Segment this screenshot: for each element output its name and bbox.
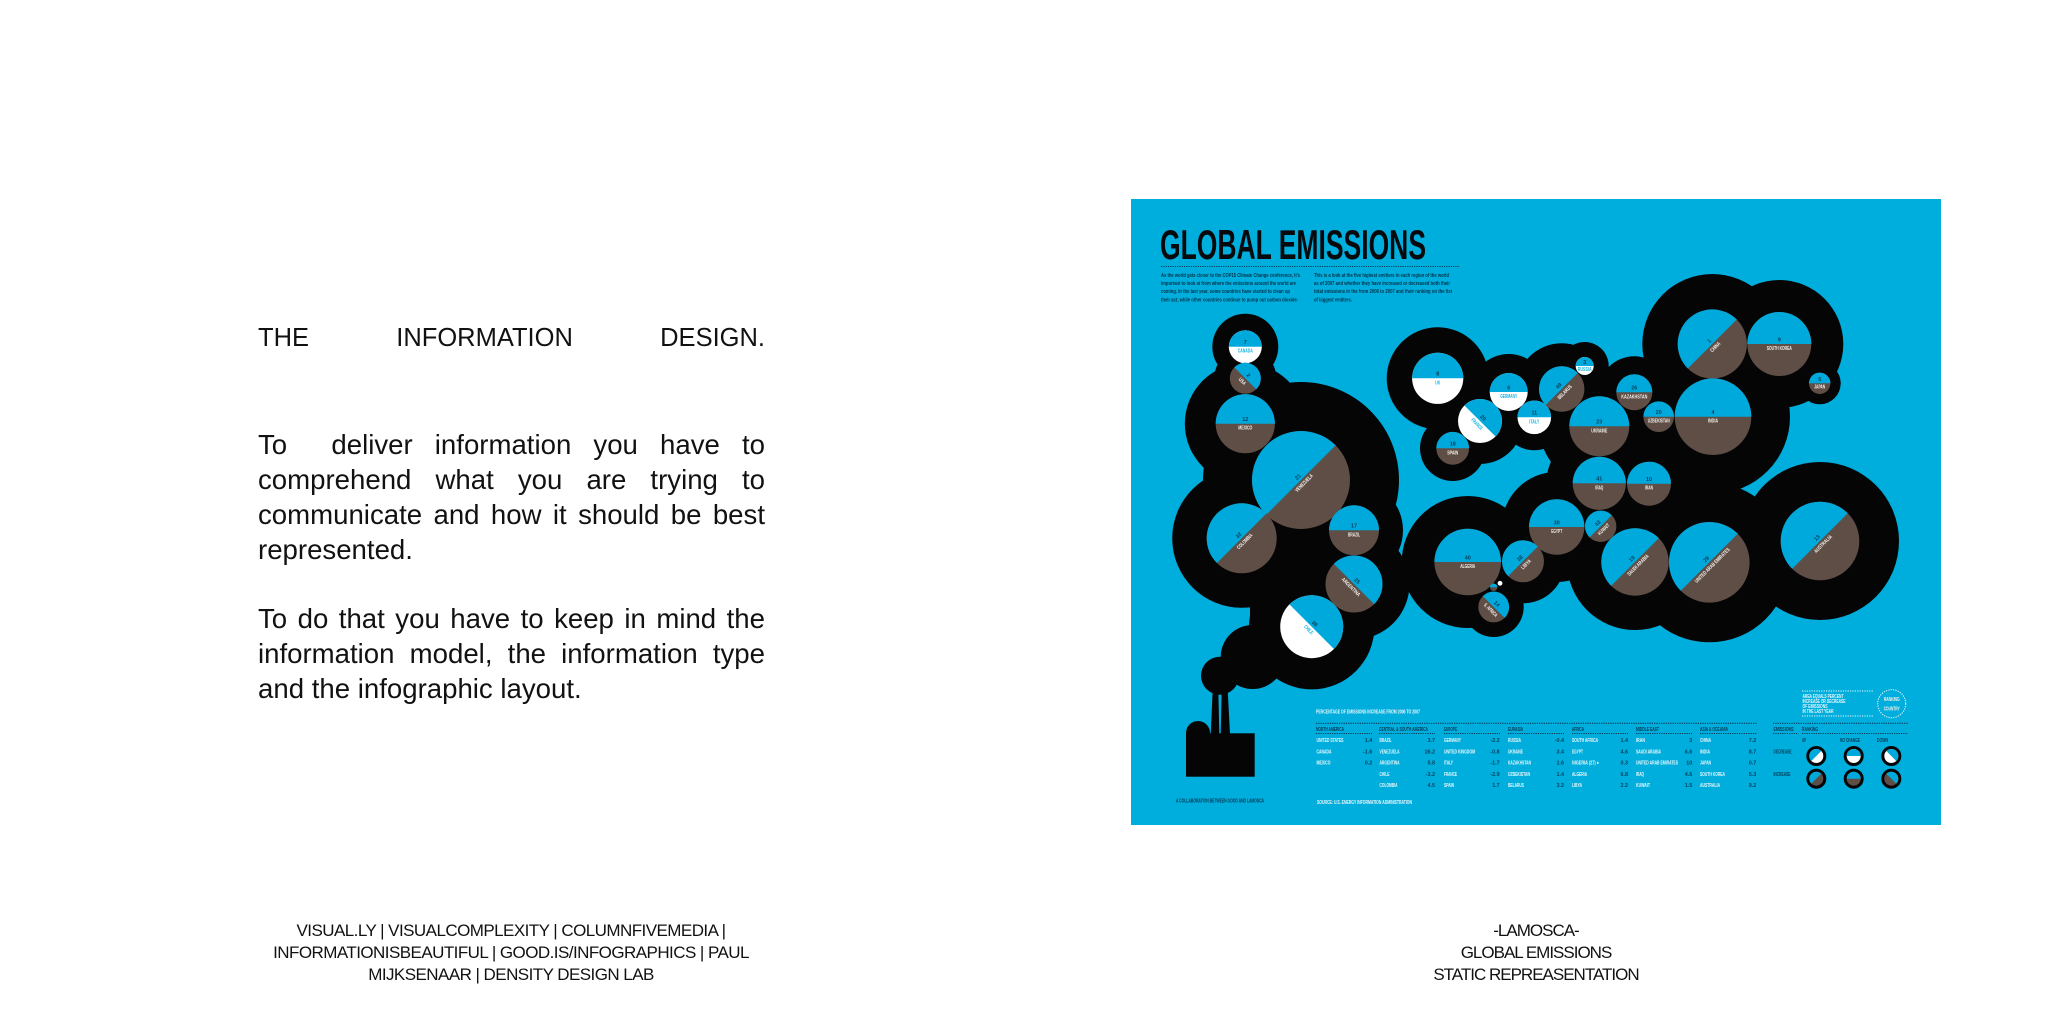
country: Kuwait: KUWAIT: [1597, 522, 1612, 537]
intro text: This is a look at the five highest emitters in each region of the world: [1314, 273, 1449, 279]
country: UK: [1412, 353, 1463, 404]
column: Africa: 6.8: [1620, 772, 1628, 778]
column: Central and South America: [1379, 727, 1435, 789]
country: Russia: RUSSIA: [1578, 367, 1592, 373]
country: France: [1449, 390, 1511, 452]
column: Middle East: MIDDLE EAST: [1636, 727, 1659, 733]
country: Canada: 7: [1244, 340, 1247, 346]
column: North America: NORTH AMERICA: [1316, 727, 1344, 733]
column: Asia and Oceania: CHINA: [1700, 738, 1711, 744]
column: Africa: 2.2: [1620, 783, 1628, 789]
legend: emissions and ranking: RANKING: [1802, 727, 1818, 733]
column: Asia and Oceania: ASIA & OCEANIA: [1700, 727, 1728, 733]
country: India: 4: [1712, 410, 1714, 416]
country: Ukraine: UKRAINE: [1591, 428, 1608, 434]
column: North America: 1.4: [1365, 738, 1372, 744]
text block: deliver information: communicate and how it should be best: [258, 499, 765, 530]
country: Nigeria: [1490, 581, 1502, 591]
text block: keep in mind: To do that you have to keep in mind the: [258, 603, 765, 634]
column: Middle East: IRAN: [1636, 738, 1645, 744]
country: Iraq: [1573, 457, 1626, 510]
country: Colombia: 32: [1235, 532, 1243, 540]
country: Colombia: [1192, 489, 1291, 588]
country: South Africa: S. AFRICA: [1482, 602, 1498, 619]
column: Europe: UNITED KINGDOM: [1444, 750, 1475, 756]
smoke cloud: [1172, 274, 1899, 695]
caption: global emissions credit: [1433, 921, 1639, 984]
column: Middle East: UNITED ARAB EMIRATES: [1636, 761, 1678, 767]
legend key: ranking country: RANKING: [1884, 697, 1900, 703]
country: Japan: 5: [1818, 377, 1821, 383]
country: Italy: [1518, 400, 1551, 434]
intro text: coming. In the last year, some countries have started to clean up: [1161, 289, 1290, 295]
country: Belarus: [1530, 357, 1594, 421]
country: Uzbekistan: UZBEKISTAN: [1648, 419, 1670, 425]
column: Middle East: SAUDI ARABIA: [1636, 750, 1661, 756]
country: United Arab Emirates: [1652, 505, 1766, 619]
intro text: As the world gets closer to the COP15 Climate Change conference, it's: [1161, 273, 1300, 279]
column: Europe: ITALY: [1444, 761, 1453, 767]
column: Central and South America: CHILE: [1380, 772, 1390, 778]
column: Africa: EGYPT: [1572, 750, 1583, 756]
column: Asia and Oceania: 7.2: [1749, 738, 1756, 744]
legend key: ranking country: COUNTRY: [1884, 706, 1900, 712]
column: Central and South America: 5.8: [1428, 761, 1435, 767]
country: Canada: CANADA: [1238, 349, 1253, 355]
country: Kazakhstan: KAZAKHSTAN: [1621, 394, 1647, 400]
text block: keep in mind: [258, 603, 765, 704]
country: Australia: [1764, 485, 1876, 597]
column: Central and South America: BRAZIL: [1380, 738, 1392, 744]
column: North America: CANADA: [1316, 750, 1332, 756]
column: Africa: LIBYA: [1572, 783, 1582, 789]
column: North America: -1.6: [1363, 750, 1372, 756]
legend: emissions and ranking: UP: [1802, 738, 1806, 744]
legend note: area equals percent: OF EMISSIONS: [1802, 704, 1828, 710]
country: Italy: ITALY: [1529, 419, 1540, 425]
column: Middle East: 1.5: [1685, 783, 1692, 789]
column: Asia and Oceania: SOUTH KOREA: [1700, 772, 1725, 778]
country: Kuwait: 43: [1594, 520, 1602, 528]
country: Argentina: 25: [1352, 577, 1361, 586]
column: Africa: 4.6: [1620, 750, 1628, 756]
column: Africa: 0.3: [1620, 761, 1628, 767]
column: Africa: [1572, 727, 1628, 789]
country: South Africa: [1472, 585, 1515, 629]
column: Africa: ALGERIA: [1572, 772, 1587, 778]
country: Algeria: ALGERIA: [1460, 564, 1475, 570]
country: USA: 2: [1245, 373, 1251, 379]
country: Iran: IRAN: [1645, 486, 1653, 492]
country: Argentina: [1314, 544, 1394, 624]
country: United Arab Emirates: UNITED ARAB EMIRATES: [1694, 547, 1732, 585]
country: Russia: 3: [1583, 360, 1586, 366]
legend note: area equals percent: AREA EQUALS PERCENT: [1802, 694, 1844, 700]
legend: emissions and ranking: EMISSIONS: [1774, 727, 1794, 733]
country: Chile: 36: [1310, 620, 1318, 628]
country: Libya: 38: [1516, 555, 1525, 563]
country: Argentina: ARGENTINA: [1340, 577, 1361, 598]
country: Kazakhstan: 26: [1631, 386, 1637, 392]
poster title: GLOBAL EMISSIONS: [1160, 221, 1426, 268]
column: Middle East: IRAQ: [1636, 772, 1644, 778]
column: Central and South America: -3.2: [1426, 772, 1435, 778]
country: Italy: 11: [1531, 411, 1537, 417]
country: Brazil: 17: [1351, 524, 1357, 530]
country: United Arab Emirates: 29: [1703, 556, 1711, 564]
column: Asia and Oceania: AUSTRALIA: [1700, 783, 1720, 789]
column: Middle East: [1636, 727, 1692, 789]
column: Middle East: KUWAIT: [1636, 783, 1650, 789]
country: Saudi Arabia: SAUDI ARABIA: [1627, 553, 1651, 578]
column: Africa: AFRICA: [1572, 727, 1584, 733]
column: Middle East: 4.6: [1685, 772, 1692, 778]
column: Asia and Oceania: 8.7: [1749, 750, 1756, 756]
heading: the information design: THE INFORMATION DESIGN.: [258, 324, 765, 352]
column: Europe: FRANCE: [1444, 772, 1457, 778]
column: Central and South America: VENEZUELA: [1380, 750, 1400, 756]
column: Africa: 1.4: [1620, 738, 1628, 744]
country: Egypt: [1529, 499, 1584, 555]
column: Europe: -1.7: [1490, 761, 1500, 767]
country: Belarus: 49: [1555, 382, 1563, 391]
intro text: of biggest emitters.: [1314, 298, 1352, 304]
legend: emissions and ranking: INCREASE: [1774, 772, 1791, 778]
country: Venezuela: 21: [1294, 473, 1303, 482]
legend note: area equals percent: IN THE LAST YEAR: [1802, 709, 1834, 715]
country: Mexico: [1216, 394, 1275, 453]
country: Colombia: COLOMBIA: [1236, 533, 1254, 551]
table rules: [1316, 723, 1757, 734]
column: Eurasia: 3.4: [1556, 750, 1564, 756]
column: Eurasia: UZBEKISTAN: [1508, 772, 1530, 778]
intro text: their act, while other countries continue to pump out carbon dioxide.: [1161, 298, 1298, 304]
factory icon: [1186, 690, 1255, 777]
country: USA: USA: [1237, 377, 1247, 387]
country: Spain: 18: [1450, 442, 1456, 448]
column: North America: MEXICO: [1316, 761, 1330, 767]
caption: global emissions credit: STATIC REPREASENTATION: [1433, 965, 1639, 984]
country: Egypt: 30: [1554, 520, 1560, 526]
country: Uzbekistan: 20: [1656, 410, 1662, 416]
country: Canada: [1229, 330, 1262, 363]
column: Eurasia: -0.4: [1555, 738, 1564, 744]
column: Europe: [1444, 727, 1500, 789]
intro text: as of 2007 and whether they have increased or decreased both their: [1314, 281, 1451, 287]
country: South Africa: 14: [1492, 600, 1500, 609]
column: Africa: SOUTH AFRICA: [1572, 738, 1598, 744]
country: Algeria: [1434, 529, 1501, 595]
intro text: total emissions in the from 2006 to 2007 and their ranking on the list: [1314, 289, 1452, 295]
country: Chile: CHILE: [1302, 624, 1314, 636]
column: Central and South America: 3.7: [1428, 738, 1435, 744]
column: Asia and Oceania: INDIA: [1700, 750, 1710, 756]
legend key: ranking country: [1878, 690, 1906, 718]
column: Eurasia: BELARUS: [1508, 783, 1524, 789]
legend: emissions and ranking: NO CHANGE: [1840, 738, 1860, 744]
column: Middle East: 6.6: [1685, 750, 1692, 756]
country: Venezuela: VENEZUELA: [1294, 473, 1315, 494]
country: UK: UK: [1435, 380, 1440, 386]
column: Eurasia: UKRAINE: [1508, 750, 1523, 756]
column: Eurasia: 3.2: [1556, 783, 1564, 789]
column: Central and South America: 16.2: [1424, 750, 1435, 756]
country: France: FRANCE: [1469, 417, 1484, 432]
country: Kuwait: [1578, 504, 1623, 549]
column: Eurasia: 1.4: [1556, 772, 1564, 778]
country: Saudi Arabia: 19: [1628, 555, 1637, 564]
country: Japan: [1809, 373, 1830, 394]
column: Europe: EUROPE: [1444, 727, 1457, 733]
country: Germany: GERMANY: [1500, 394, 1517, 400]
text block: keep in mind: and the infographic layout.: [258, 673, 582, 704]
country: Russia: [1576, 357, 1594, 375]
column: Middle East: 10: [1686, 761, 1692, 767]
country: South Korea: 9: [1778, 337, 1781, 343]
country: Spain: [1436, 432, 1469, 465]
text block: deliver information: represented.: [258, 534, 413, 565]
country: Germany: [1490, 373, 1528, 411]
intro text: important to look at from where the emissions around the world are: [1161, 281, 1296, 287]
country: South Korea: SOUTH KOREA: [1767, 346, 1792, 352]
country: Libya: [1493, 532, 1553, 591]
column: Europe: 1.7: [1492, 783, 1500, 789]
column: Central and South America: COLOMBIA: [1380, 783, 1398, 789]
country: South Korea: [1747, 312, 1811, 376]
country: Venezuela: [1232, 411, 1370, 549]
text block: deliver information: comprehend what you are trying to: [258, 464, 765, 495]
caption: sources: VISUAL.LY | VISUALCOMPLEXITY | COLUMNFIVEMEDIA |: [296, 921, 725, 940]
country: Uzbekistan: [1643, 401, 1674, 432]
country: France: 20: [1478, 414, 1487, 423]
country: Saudi Arabia: [1587, 514, 1683, 610]
country: Libya: LIBYA: [1520, 558, 1533, 571]
country: Japan: JAPAN: [1814, 384, 1825, 390]
legend: emissions and ranking: DECREASE: [1774, 750, 1792, 756]
country: Chile: [1267, 582, 1356, 671]
column: North America: [1316, 727, 1372, 767]
country: China: [1663, 295, 1761, 393]
country: Australia: AUSTRALIA: [1813, 534, 1834, 555]
country: Spain: SPAIN: [1447, 450, 1458, 456]
column: North America: 0.2: [1365, 761, 1372, 767]
legend: emissions and ranking: [1773, 723, 1908, 791]
text block: deliver information: [258, 429, 765, 565]
text block: deliver information: To deliver information you have to: [258, 429, 765, 460]
column: Eurasia: EURASIA: [1508, 727, 1523, 733]
column: Asia and Oceania: JAPAN: [1700, 761, 1711, 767]
country: Iraq: 41: [1596, 477, 1602, 483]
country: Mexico: 12: [1242, 417, 1248, 423]
caption: sources: INFORMATIONISBEAUTIFUL | GOOD.IS/INFOGRAPHICS | PAUL: [273, 943, 749, 962]
country: Egypt: EGYPT: [1551, 529, 1563, 535]
column: North America: UNITED STATES: [1316, 738, 1344, 744]
column: Europe: SPAIN: [1444, 783, 1454, 789]
country: Germany: 6: [1507, 385, 1510, 391]
country: Iraq: IRAQ: [1595, 485, 1603, 491]
country: Ukraine: 23: [1596, 420, 1602, 426]
column: Europe: GERMANY: [1444, 738, 1461, 744]
column: Middle East: 3: [1689, 738, 1692, 744]
column: Eurasia: 1.6: [1556, 761, 1564, 767]
column: Asia and Oceania: [1700, 727, 1756, 789]
caption: sources: [273, 921, 749, 984]
caption: sources: MIJKSENAAR | DENSITY DESIGN LAB: [368, 965, 654, 984]
column: Asia and Oceania: 0.7: [1749, 761, 1756, 767]
column: Eurasia: [1508, 727, 1564, 789]
source: SOURCE: U.S. ENERGY INFORMATION ADMINISTRATION: [1317, 800, 1412, 806]
legend note: area equals percent: [1802, 691, 1874, 716]
caption: global emissions credit: GLOBAL EMISSIONS: [1461, 943, 1611, 962]
country: Iran: [1627, 462, 1671, 506]
column: Europe: -2.9: [1490, 772, 1500, 778]
column: Asia and Oceania: 5.3: [1749, 772, 1756, 778]
country: Australia: 13: [1813, 534, 1822, 543]
country: India: [1675, 378, 1751, 455]
country: USA: [1223, 356, 1267, 400]
column: Africa: NIGERIA (27) ●: [1572, 761, 1599, 767]
table heading: PERCENTAGE OF EMISSIONS INCREASE FROM 2006 TO 2007: [1316, 710, 1420, 716]
country: Brazil: [1329, 505, 1379, 555]
column: Eurasia: RUSSIA: [1508, 738, 1521, 744]
country: Ukraine: [1569, 396, 1629, 456]
country: India: INDIA: [1708, 419, 1718, 425]
text block: keep in mind: information model, the information type: [258, 638, 765, 669]
column: Central and South America: CENTRAL & SOUTH AMERICA: [1379, 727, 1428, 733]
column: Asia and Oceania: 9.2: [1749, 783, 1756, 789]
legend: emissions and ranking: DOWN: [1877, 738, 1888, 744]
country: Iran: 10: [1646, 477, 1652, 483]
column: Central and South America: ARGENTINA: [1380, 761, 1400, 767]
country: Kazakhstan: [1616, 374, 1652, 410]
credit: A COLLABORATION BETWEEN GOOD AND LAMOSCA: [1176, 799, 1264, 805]
country: Mexico: MEXICO: [1238, 426, 1252, 432]
column: Eurasia: KAZAKHSTAN: [1508, 761, 1531, 767]
country: Algeria: 40: [1465, 555, 1471, 561]
country: China: CHINA: [1709, 341, 1722, 354]
column: Europe: -2.2: [1490, 738, 1500, 744]
country: Belarus: BELARUS: [1557, 384, 1574, 401]
intro text: [1161, 266, 1459, 304]
legend note: area equals percent: INCREASE OR DECREASE: [1802, 699, 1846, 705]
column: Central and South America: 4.5: [1428, 783, 1435, 789]
column: Europe: -0.8: [1490, 750, 1500, 756]
caption: global emissions credit: -LAMOSCA-: [1493, 921, 1579, 940]
country: Brazil: BRAZIL: [1348, 532, 1360, 538]
country: UK: 8: [1436, 372, 1439, 378]
country: China: 1: [1707, 338, 1713, 345]
